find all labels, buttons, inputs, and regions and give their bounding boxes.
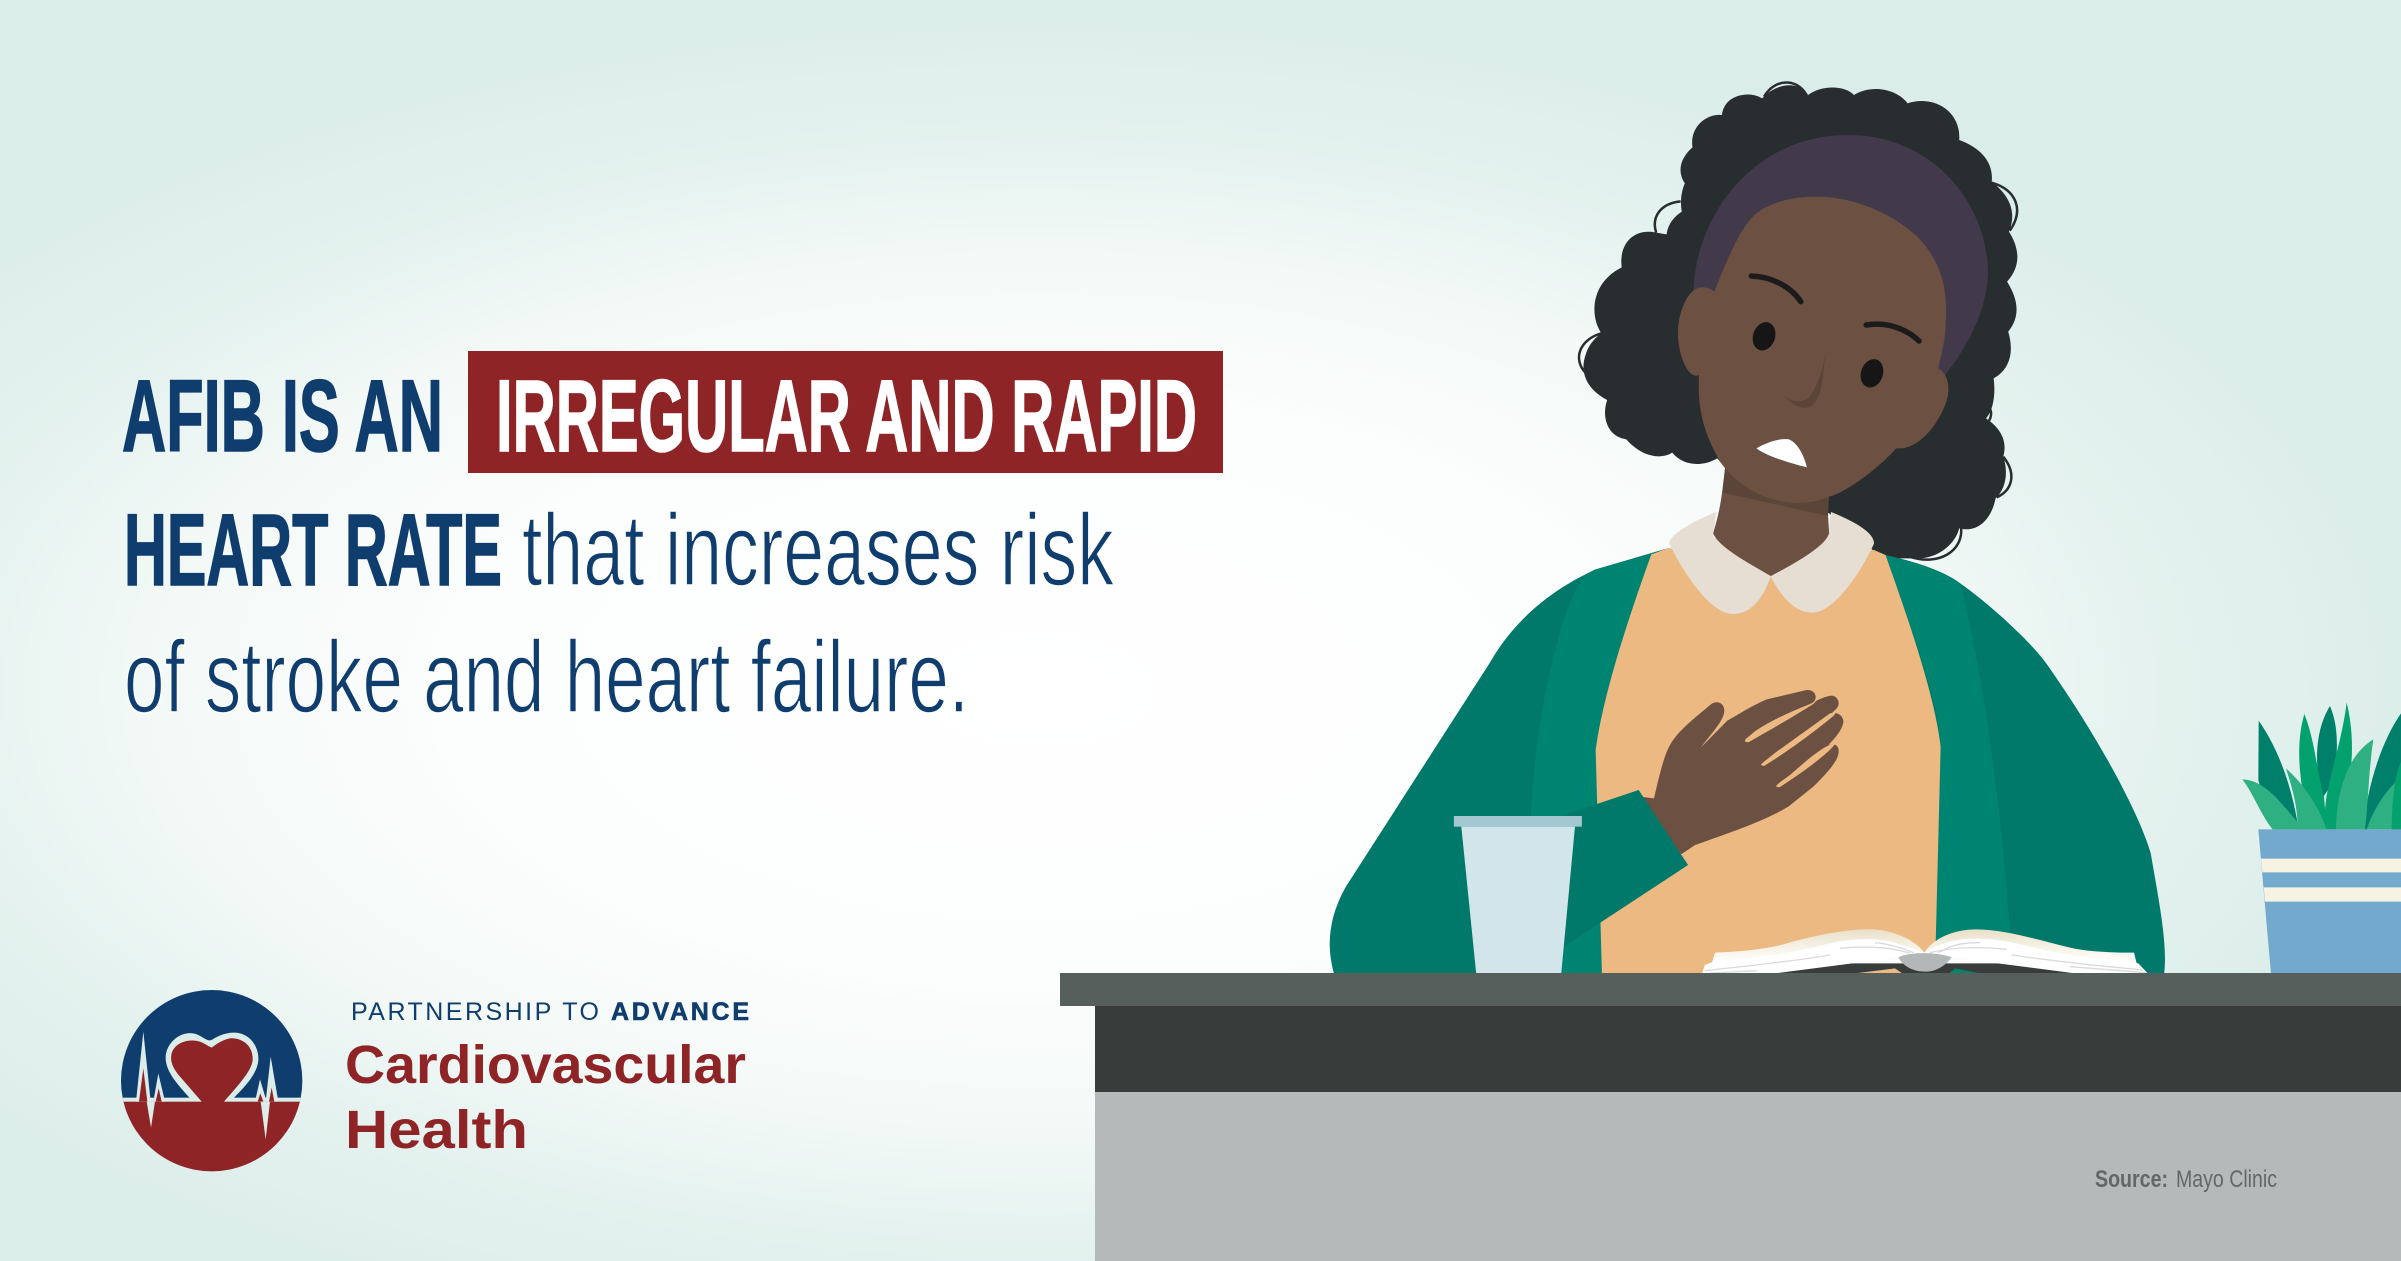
right eyebrow xyxy=(1866,324,1919,341)
desk top xyxy=(1060,973,2401,1006)
source note: Source: xyxy=(2095,1166,2168,1193)
head xyxy=(1678,135,1988,576)
logo text: partnership to advance: ADVANCE xyxy=(611,998,749,1026)
headline line 1: AFIB IS AN xyxy=(122,359,443,473)
cardigan and sweater xyxy=(1330,548,2165,975)
logo text: partnership to advance: PARTNERSHIP TO xyxy=(351,998,599,1026)
headline line 2: HEART RATE xyxy=(124,493,502,607)
cardigan lower strip xyxy=(1559,922,1602,975)
logo emblem xyxy=(121,990,302,1172)
plant leaves xyxy=(2242,703,2401,829)
headline line 1: IRREGULAR AND RAPID xyxy=(496,359,1197,473)
source note: Mayo Clinic xyxy=(2176,1166,2277,1193)
highlight box xyxy=(468,351,1223,473)
source note xyxy=(2095,1166,2277,1193)
open book xyxy=(1702,929,2148,974)
plant in pot xyxy=(2242,703,2401,974)
headband xyxy=(1693,135,1988,377)
nose xyxy=(1785,353,1825,408)
left eyebrow xyxy=(1751,276,1801,302)
logo text: cardiovascular health: Cardiovascular xyxy=(345,1035,746,1095)
cardigan front panel right xyxy=(1886,555,2013,975)
headline line 1 xyxy=(122,351,1223,473)
headline line 3: of stroke and heart failure. xyxy=(124,620,969,734)
headline xyxy=(122,351,1223,734)
logo xyxy=(115,985,749,1178)
desk body xyxy=(1095,1092,2401,1261)
cardigan xyxy=(1330,548,2165,975)
hair xyxy=(1579,82,2017,560)
hand xyxy=(1640,690,1843,854)
sleeve cuff xyxy=(1561,790,1688,948)
logo text: partnership to advance xyxy=(351,998,749,1026)
collar xyxy=(1669,512,1874,614)
desk front band xyxy=(1095,1006,2401,1092)
right eye xyxy=(1858,357,1886,389)
neck xyxy=(1713,468,1829,576)
sweater xyxy=(1596,548,1941,975)
neck shadow xyxy=(1723,468,1829,516)
pot xyxy=(2258,829,2401,974)
logo text: cardiovascular health: Health xyxy=(345,1100,528,1160)
face xyxy=(1678,197,1948,503)
cardigan front panel left xyxy=(1531,554,1651,817)
headline line 2: that increases risk xyxy=(522,493,1115,607)
headline line 2 xyxy=(124,493,1115,607)
cup xyxy=(1454,816,1582,974)
mouth xyxy=(1756,439,1807,467)
desk xyxy=(1060,973,2401,1261)
logo text: cardiovascular health xyxy=(345,1035,746,1160)
illustration: woman with hand on chest xyxy=(1330,82,2165,975)
left eye xyxy=(1750,320,1778,352)
